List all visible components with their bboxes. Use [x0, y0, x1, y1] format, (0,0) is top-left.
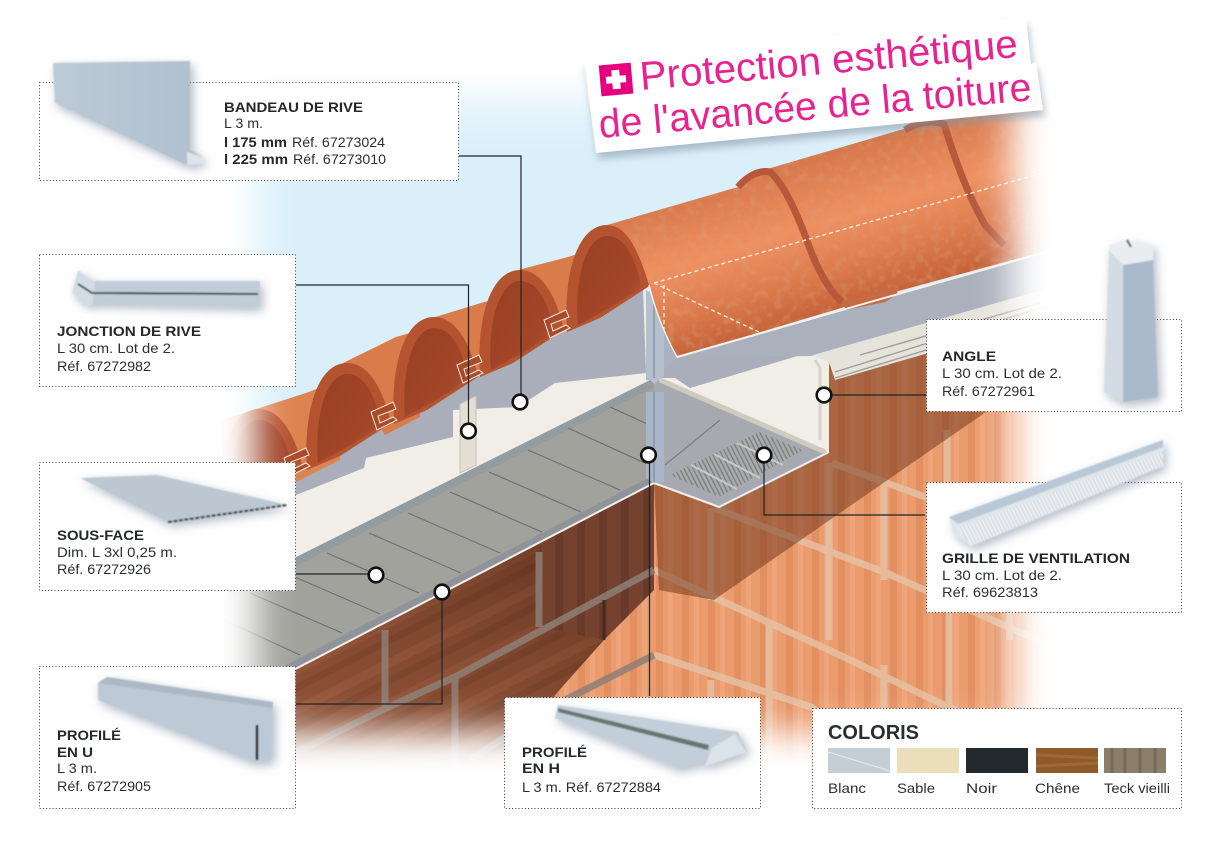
product: sous-face	[80, 475, 287, 522]
left white fascia	[296, 290, 650, 558]
left brick wall	[296, 484, 656, 762]
sous-face text	[57, 527, 177, 577]
panel: grille de ventilation	[942, 440, 1163, 600]
product: bandeau	[53, 61, 203, 165]
profilé H text: PROFILÉ	[522, 744, 587, 760]
product: jonction	[72, 270, 260, 307]
panel: sous-face	[57, 475, 287, 577]
markers	[369, 388, 831, 599]
panel: angle	[942, 240, 1158, 402]
swatch: chêne: Chêne	[1035, 780, 1080, 796]
product: profilé H	[555, 705, 747, 768]
grille text	[942, 550, 1130, 600]
icon: plus square	[599, 63, 633, 96]
bandeau text: l 175 mm	[224, 134, 287, 150]
sous-face text: SOUS-FACE	[57, 527, 144, 543]
profilé U text: EN U	[57, 744, 93, 760]
profilé U text: Réf. 67272905	[57, 778, 151, 794]
swatch: blanc: Blanc	[828, 780, 866, 796]
angle text: ANGLE	[942, 348, 996, 364]
profilé U text	[57, 727, 151, 794]
banner	[584, 18, 1043, 153]
swatch: noir	[966, 748, 1028, 796]
jonction text: L 30 cm. Lot de 2.	[57, 340, 175, 356]
panel boxes	[40, 82, 1182, 808]
jonction text: JONCTION DE RIVE	[57, 323, 201, 339]
profilé H text: EN H	[522, 760, 560, 776]
sous-face text: Dim. L 3xl 0,25 m.	[57, 544, 177, 560]
right gable band	[646, 258, 1036, 380]
swatch: blanc	[828, 748, 890, 796]
bandeau text: l 225 mm	[224, 151, 288, 167]
banner line 1: Protection esthétique	[638, 22, 1019, 99]
illustration: roof cutaway	[226, 86, 1042, 762]
grille text: Réf. 69623813	[942, 584, 1038, 600]
product: angle	[1104, 240, 1158, 402]
H profile in place	[646, 290, 664, 483]
swatch: sable: Sable	[897, 780, 935, 796]
profilé H text	[522, 744, 661, 795]
barrel tile ends	[236, 225, 649, 474]
panel: jonction de rive	[57, 270, 260, 374]
right soffit and grille	[654, 378, 829, 507]
profilé H text: L 3 m. Réf. 67272884	[522, 779, 661, 795]
swatch: chêne	[1035, 748, 1098, 796]
jonction text: Réf. 67272982	[57, 358, 151, 374]
panel: profilé en H	[522, 705, 747, 795]
swatch: sable	[897, 748, 959, 796]
panel: coloris	[828, 722, 1170, 796]
dashed cut lines	[654, 174, 1035, 332]
right brick wall	[654, 280, 1060, 790]
wall shadow	[654, 354, 986, 600]
product: grille	[949, 440, 1163, 546]
profilé U text: L 3 m.	[57, 760, 97, 776]
bandeau text: BANDEAU DE RIVE	[224, 99, 363, 115]
swatch: teck vieilli	[1104, 748, 1170, 796]
jonction text	[57, 323, 201, 374]
bandeau text: Réf. 67273010	[293, 151, 386, 167]
large tile	[607, 111, 1042, 358]
angle text: L 30 cm. Lot de 2.	[942, 365, 1062, 381]
tiles behind	[228, 254, 576, 482]
sky	[200, 70, 1060, 470]
banner line 2: de l'avancée de la toiture	[597, 65, 1033, 147]
panel: profilé en U	[57, 677, 273, 794]
right white fascia	[654, 352, 829, 453]
panel: bandeau de rive	[53, 61, 386, 167]
bandeau text: Réf. 67273024	[292, 134, 385, 150]
angle text	[942, 348, 1062, 399]
product: profilé U	[98, 677, 273, 762]
grille text: GRILLE DE VENTILATION	[942, 550, 1130, 566]
swatch: noir: Noir	[966, 780, 997, 796]
coloris heading: COLORIS	[828, 722, 919, 744]
swatch: teck vieilli: Teck vieilli	[1104, 780, 1170, 796]
bandeau text	[224, 99, 386, 167]
grille text: L 30 cm. Lot de 2.	[942, 567, 1062, 583]
sous-face text: Réf. 67272926	[57, 561, 151, 577]
bandeau text: L 3 m.	[224, 115, 263, 131]
leader lines	[296, 156, 926, 704]
profilé U text: PROFILÉ	[57, 727, 121, 743]
soffit panels	[228, 380, 654, 670]
angle text: Réf. 67272961	[942, 383, 1035, 399]
